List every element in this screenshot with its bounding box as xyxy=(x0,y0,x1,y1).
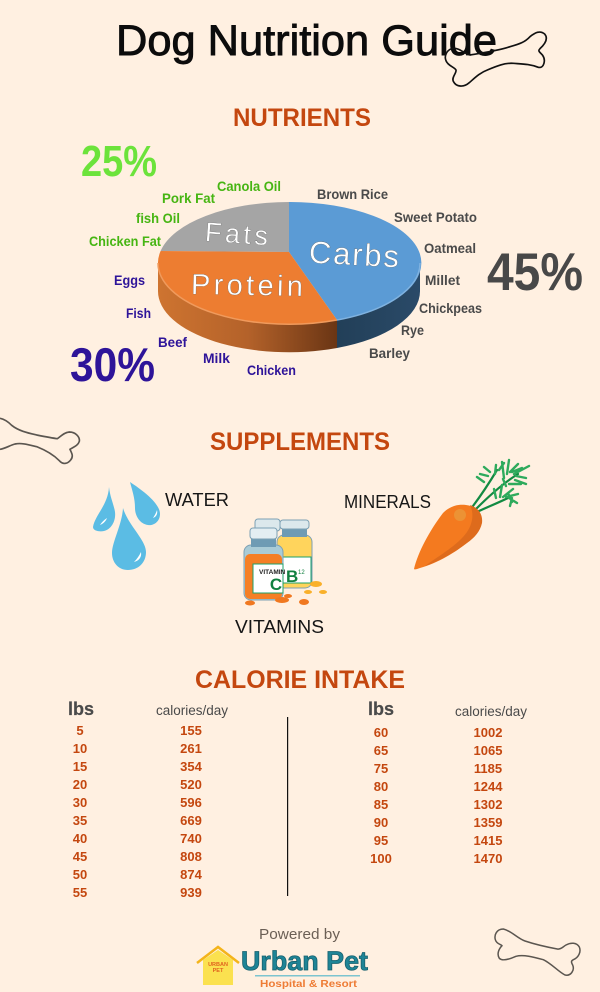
percent: protein 30%: 30% xyxy=(70,338,155,391)
carb sources: Chickpeas xyxy=(419,300,482,316)
table: calories left: 874 xyxy=(180,867,203,882)
heading: nutrients: NUTRIENTS xyxy=(233,104,371,132)
table: calories right: 1359 xyxy=(474,815,502,830)
label: protein: Protein xyxy=(191,269,303,303)
table: calories right: 80 xyxy=(374,779,388,794)
logo tagline: Hospital & Resort xyxy=(260,979,358,990)
fat sources: Chicken Fat xyxy=(89,233,161,249)
table: calories left: 596 xyxy=(180,795,202,810)
icon: water drops xyxy=(93,482,160,570)
logo house text line two: PET xyxy=(213,968,224,974)
percent: carbs 45%: 45% xyxy=(487,243,583,302)
carrot leaves xyxy=(473,460,529,511)
icon: vitamin bottles xyxy=(244,519,327,606)
pie side: protein xyxy=(158,263,337,352)
carb sources: Oatmeal xyxy=(424,240,476,256)
table: calories left: 55 xyxy=(73,885,87,900)
icon: bottom right bone xyxy=(495,929,580,975)
table: calories left: 15 xyxy=(73,759,87,774)
label: fats: Fats xyxy=(204,217,269,251)
table: calories left: 20 xyxy=(73,777,87,792)
pie side: carbs xyxy=(337,263,420,348)
label text B: B xyxy=(286,567,298,586)
protein sources: Fish xyxy=(126,305,151,321)
table: calories left: 45 xyxy=(73,849,87,864)
bottle B12 xyxy=(277,535,312,588)
table: calories right: 1244 xyxy=(474,779,503,794)
chart: 3D pie of nutrients xyxy=(158,202,421,352)
table: calories left: 354 xyxy=(180,759,203,774)
protein sources: Beef xyxy=(158,334,187,350)
table: calories right: 60 xyxy=(374,725,388,740)
logo wordmark: Urban Pet xyxy=(241,946,368,976)
slice: fats xyxy=(161,202,289,252)
carrot shading xyxy=(425,505,482,566)
carb sources: Brown Rice xyxy=(317,186,388,202)
protein sources: Milk xyxy=(203,350,230,366)
table: calories right: calories/day xyxy=(455,704,527,719)
logo house xyxy=(197,947,239,963)
table: calories left: 740 xyxy=(180,831,202,846)
table: calories right: 1065 xyxy=(474,743,502,758)
fat sources: fish Oil xyxy=(136,210,180,226)
carb sources: Rye xyxy=(401,322,424,338)
logo house text: URBAN xyxy=(208,962,228,968)
slice: carbs xyxy=(289,202,421,320)
label text C: C xyxy=(270,575,282,594)
title: Dog Nutrition Guide xyxy=(116,17,497,65)
protein sources: Chicken xyxy=(247,362,296,378)
table: calories right: lbs xyxy=(368,699,394,719)
back bottle cap xyxy=(255,519,280,531)
table: calories left: 10 xyxy=(73,741,87,756)
table: calories left: 261 xyxy=(180,741,202,756)
table: calories right: 75 xyxy=(374,761,388,776)
carb sources: Millet xyxy=(425,272,460,288)
label: carbs: Carbs xyxy=(308,235,400,274)
protein sources xyxy=(114,272,296,378)
bottle C xyxy=(244,545,283,600)
table: calories left: 30 xyxy=(73,795,87,810)
table: calories left: 520 xyxy=(180,777,202,792)
table: calories right: 1470 xyxy=(474,851,502,866)
table: calories left xyxy=(68,699,228,900)
fat sources: Pork Fat xyxy=(162,190,215,206)
label text 12: 12 xyxy=(298,570,305,576)
table divider xyxy=(287,717,288,896)
table: calories right: 95 xyxy=(374,833,388,848)
table: calories left: 808 xyxy=(180,849,202,864)
carb sources xyxy=(317,186,482,361)
table: calories right: 1002 xyxy=(474,725,502,740)
table: calories left: 35 xyxy=(73,813,87,828)
percent: fats 25%: 25% xyxy=(81,137,157,186)
pie rim highlight: carbs xyxy=(337,263,420,320)
table: calories right: 65 xyxy=(374,743,388,758)
table: calories left: 5 xyxy=(76,723,84,738)
table: calories left: 669 xyxy=(180,813,202,828)
fat sources xyxy=(89,178,281,249)
table: calories right: 1302 xyxy=(474,797,502,812)
table: calories right: 100 xyxy=(370,851,392,866)
pie rim highlight: protein xyxy=(158,263,337,324)
slice: protein xyxy=(158,251,337,324)
label: water: WATER xyxy=(165,490,229,510)
table: calories left: 40 xyxy=(73,831,87,846)
heading: supplements: SUPPLEMENTS xyxy=(210,428,390,456)
powered by: Powered by xyxy=(259,926,341,943)
icon: left bone xyxy=(0,418,79,463)
fat sources: Canola Oil xyxy=(217,178,281,194)
label: minerals: MINERALS xyxy=(344,492,431,512)
carb sources: Sweet Potato xyxy=(394,209,477,225)
logo: urban pet xyxy=(197,946,368,990)
logo underline xyxy=(255,975,360,976)
table: calories right: 1185 xyxy=(474,761,502,776)
protein sources: Eggs xyxy=(114,272,145,288)
icon: carrot xyxy=(414,460,529,569)
table: calories right xyxy=(368,699,527,866)
label: vitamins: VITAMINS xyxy=(235,617,324,637)
table: calories right: 1415 xyxy=(474,833,502,848)
icon: top bone xyxy=(445,32,546,86)
table: calories left: 50 xyxy=(73,867,87,882)
label text vitamin: VITAMIN xyxy=(259,569,286,576)
table: calories left: calories/day xyxy=(156,703,228,718)
table: calories left: lbs xyxy=(68,699,94,719)
table: calories right: 85 xyxy=(374,797,388,812)
table: calories right: 90 xyxy=(374,815,388,830)
heading: calorie intake: CALORIE INTAKE xyxy=(195,666,405,694)
pills xyxy=(304,581,327,594)
carrot body xyxy=(414,505,482,569)
table: calories left: 939 xyxy=(180,885,202,900)
carb sources: Barley xyxy=(369,345,410,361)
table: calories left: 155 xyxy=(180,723,202,738)
